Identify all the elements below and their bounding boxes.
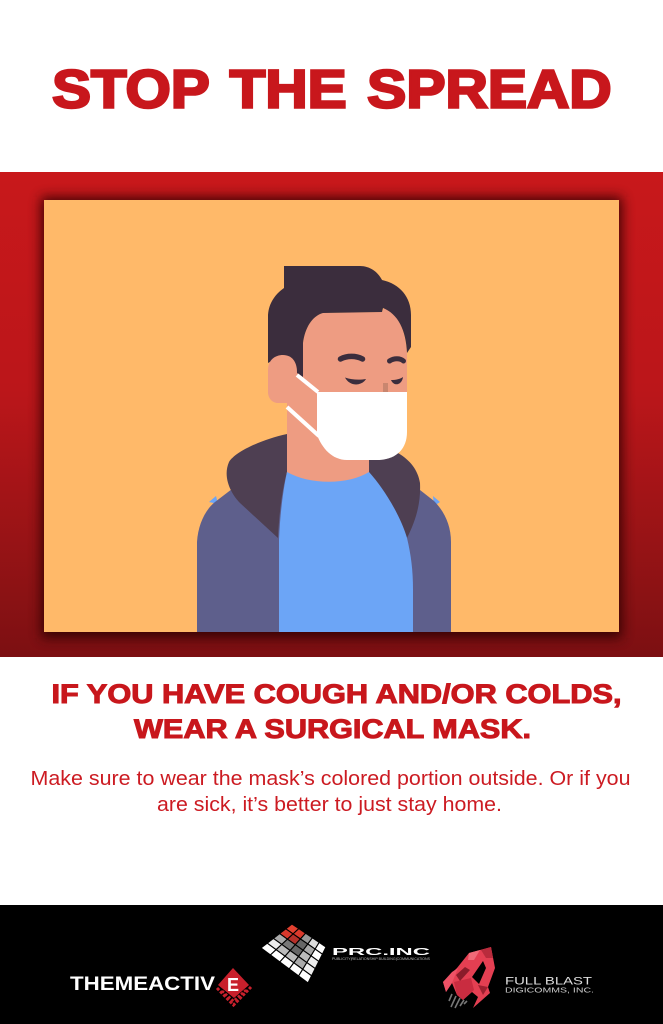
body text: are sick, it’s better to just stay home.	[157, 793, 502, 816]
heading: IF YOU HAVE COUGH AND/OR COLDS,	[52, 679, 622, 709]
logo: Themeactive: THEMEACTIV	[70, 974, 215, 995]
logo: Full Blast Digicomms: DIGICOMMS, INC.	[505, 986, 594, 994]
logo: PRC.INC	[261, 924, 430, 983]
shirt	[279, 472, 413, 632]
logo: PRC.INC: PUBLICITY|RELATIONSHIP BUILDING|COMMUNICATIONS	[332, 956, 430, 961]
footer band	[0, 905, 663, 1024]
shirt shoulder highlights	[209, 496, 440, 506]
icon: exhaust hatching	[449, 994, 467, 1008]
eyebrows	[340, 356, 362, 359]
mask straps	[297, 375, 318, 392]
logo: Themeactive	[70, 968, 251, 1005]
ear	[268, 355, 297, 403]
nose	[383, 383, 388, 392]
illustration: man wearing surgical mask	[197, 266, 451, 632]
title: STOP	[52, 60, 210, 119]
icon: geometric rocket	[443, 947, 495, 1008]
heading: WEAR A SURGICAL MASK.	[134, 714, 531, 744]
logo: Full Blast Digicomms: FULL BLAST	[505, 976, 592, 988]
eyes	[345, 378, 366, 384]
icon: perspective tile grid	[261, 924, 326, 983]
heading	[52, 679, 622, 744]
body text: Make sure to wear the mask’s colored portion outside. Or if you	[30, 767, 630, 790]
icon: red diamond with E	[217, 968, 251, 1005]
logo: PRC.INC: PRC.INC	[332, 947, 430, 958]
body text	[30, 767, 630, 816]
title	[52, 60, 612, 119]
hood collar	[227, 434, 287, 538]
hair	[268, 266, 411, 377]
icon: red diamond with E: E	[227, 975, 239, 995]
jacket	[197, 470, 451, 632]
surgical mask	[317, 392, 407, 460]
title: THE	[230, 60, 347, 119]
panel: illustration backdrop	[0, 172, 663, 657]
title: SPREAD	[367, 60, 612, 119]
panel: orange illustration background	[44, 200, 619, 632]
neck and face skin	[287, 308, 407, 482]
logo: Full Blast Digicomms	[443, 947, 594, 1008]
